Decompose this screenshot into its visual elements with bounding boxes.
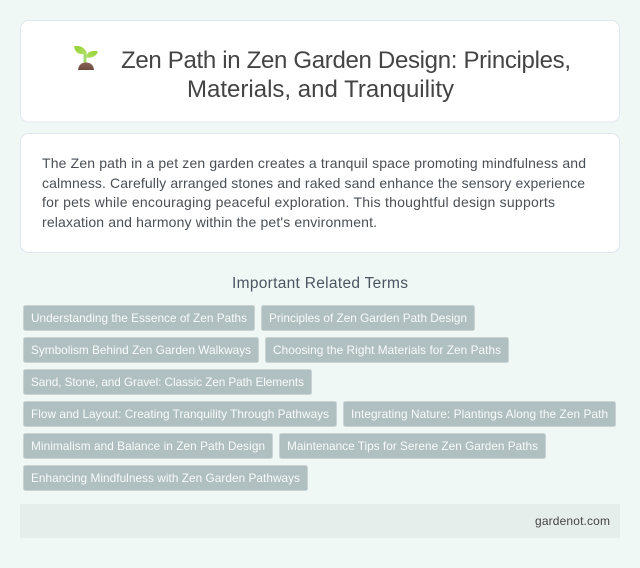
tag: maintenance <box>280 434 546 458</box>
tag: understanding the essence <box>24 306 254 330</box>
description panel <box>20 134 620 252</box>
icon: seedling <box>74 46 98 70</box>
tag: mindfulness <box>24 466 308 490</box>
footer text: gardenot.com <box>535 514 610 528</box>
tag: minimalism: Minimalism and Balance in Zen Path Design <box>31 439 265 453</box>
tag: symbolism: Symbolism Behind Zen Garden Walkways <box>31 343 251 357</box>
tag: integrating nature <box>344 402 616 426</box>
footer bar <box>20 504 620 538</box>
description text: calmness. Carefully arranged stones and raked sand enhance the sensory experience <box>42 175 585 191</box>
heading: important related terms: Important Related Terms <box>232 275 408 292</box>
title: Zen Path in Zen Garden Design: Principles, <box>121 47 571 74</box>
tag list <box>24 306 616 490</box>
tag: integrating nature: Integrating Nature: Plantings Along the Zen Path <box>351 407 608 421</box>
tag: principles: Principles of Zen Garden Path Design <box>269 311 467 325</box>
tag: symbolism <box>24 338 258 362</box>
tag: mindfulness: Enhancing Mindfulness with Zen Garden Pathways <box>31 471 300 485</box>
tag: maintenance: Maintenance Tips for Serene Zen Garden Paths <box>287 439 538 453</box>
title: Materials, and Tranquility <box>187 76 454 103</box>
description text: for pets while encouraging peaceful exploration. This thoughtful design supports <box>42 194 555 210</box>
tag: choosing materials <box>266 338 508 362</box>
description text <box>42 155 586 230</box>
tag: choosing materials: Choosing the Right Materials for Zen Paths <box>273 343 501 357</box>
tag: sand stone gravel <box>24 370 312 394</box>
header panel <box>20 20 620 122</box>
description text: The Zen path in a pet zen garden creates a tranquil space promoting mindfulness and <box>42 155 586 171</box>
tag: flow and layout: Flow and Layout: Creating Tranquility Through Pathways <box>31 407 329 421</box>
tag: principles <box>262 306 474 330</box>
tag: minimalism <box>24 434 272 458</box>
description text: relaxation and harmony within the pet's environment. <box>42 214 377 230</box>
tag: sand stone gravel: Sand, Stone, and Gravel: Classic Zen Path Elements <box>31 375 304 389</box>
title <box>121 47 571 103</box>
tag: flow and layout <box>24 402 336 426</box>
tag: understanding the essence: Understanding the Essence of Zen Paths <box>31 311 247 325</box>
